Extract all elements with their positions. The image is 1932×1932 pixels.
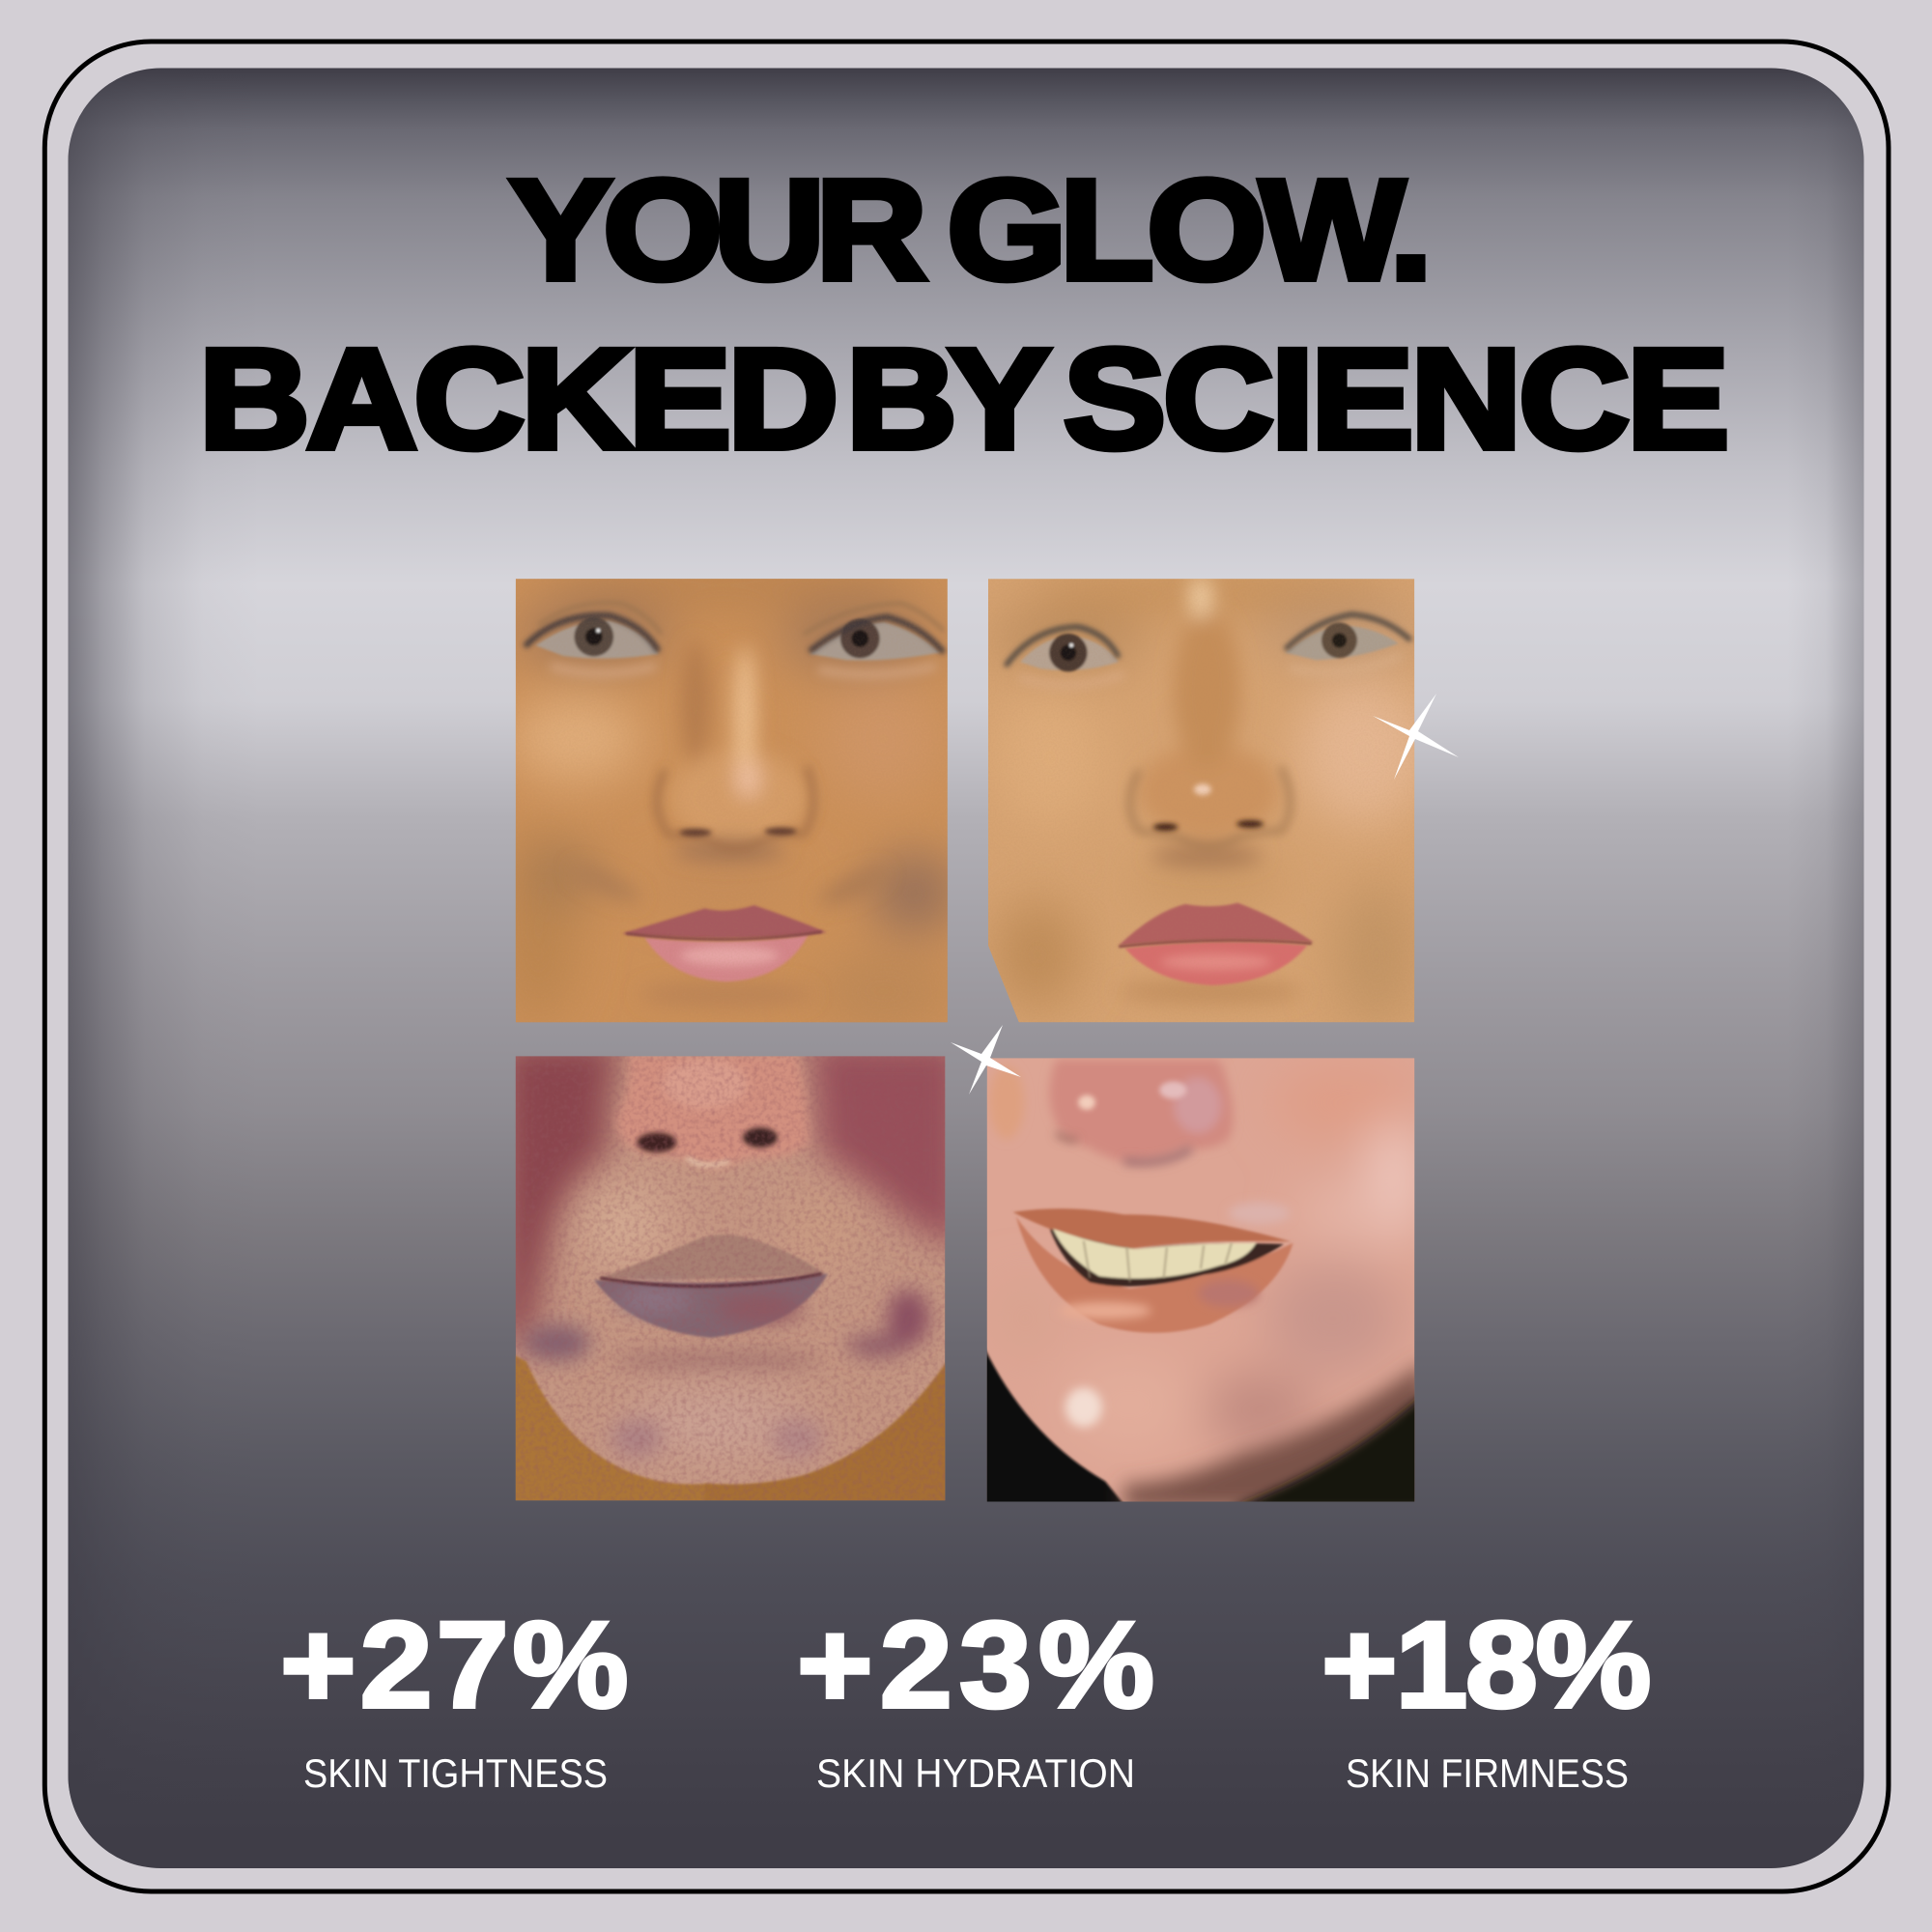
title: YOUR: [510, 152, 927, 309]
photo: after, smiling lower face: [982, 1058, 1426, 1509]
title: [199, 152, 1729, 478]
stat: +18% skin firmness: +18%: [1321, 1596, 1651, 1733]
sparkle: right edge of upper-right photo: [1373, 694, 1459, 780]
sparkle: between lower photos: [951, 1025, 1021, 1094]
photo: after, upper face: [988, 570, 1432, 1029]
title: GLOW.: [947, 152, 1433, 309]
stat: +18% skin firmness: [1321, 1596, 1651, 1796]
stat: +18% skin firmness: SKIN FIRMNESS: [1346, 1750, 1629, 1796]
photo: before, upper face: [501, 563, 957, 1029]
title: SCIENCE: [1064, 321, 1729, 478]
stat: +23% skin hydration: SKIN HYDRATION: [816, 1750, 1135, 1796]
photo: before, irritated lower face: [516, 1056, 945, 1501]
stat: +27% skin tightness: [280, 1596, 628, 1796]
stat: +27% skin tightness: SKIN TIGHTNESS: [303, 1750, 608, 1796]
stat: +27% skin tightness: +27%: [280, 1596, 628, 1733]
title: BY: [846, 321, 1051, 478]
photo grid: [501, 563, 1432, 1509]
stat: +23% skin hydration: [797, 1596, 1154, 1796]
stat: +23% skin hydration: +23%: [797, 1596, 1154, 1733]
title: BACKED: [199, 321, 838, 478]
